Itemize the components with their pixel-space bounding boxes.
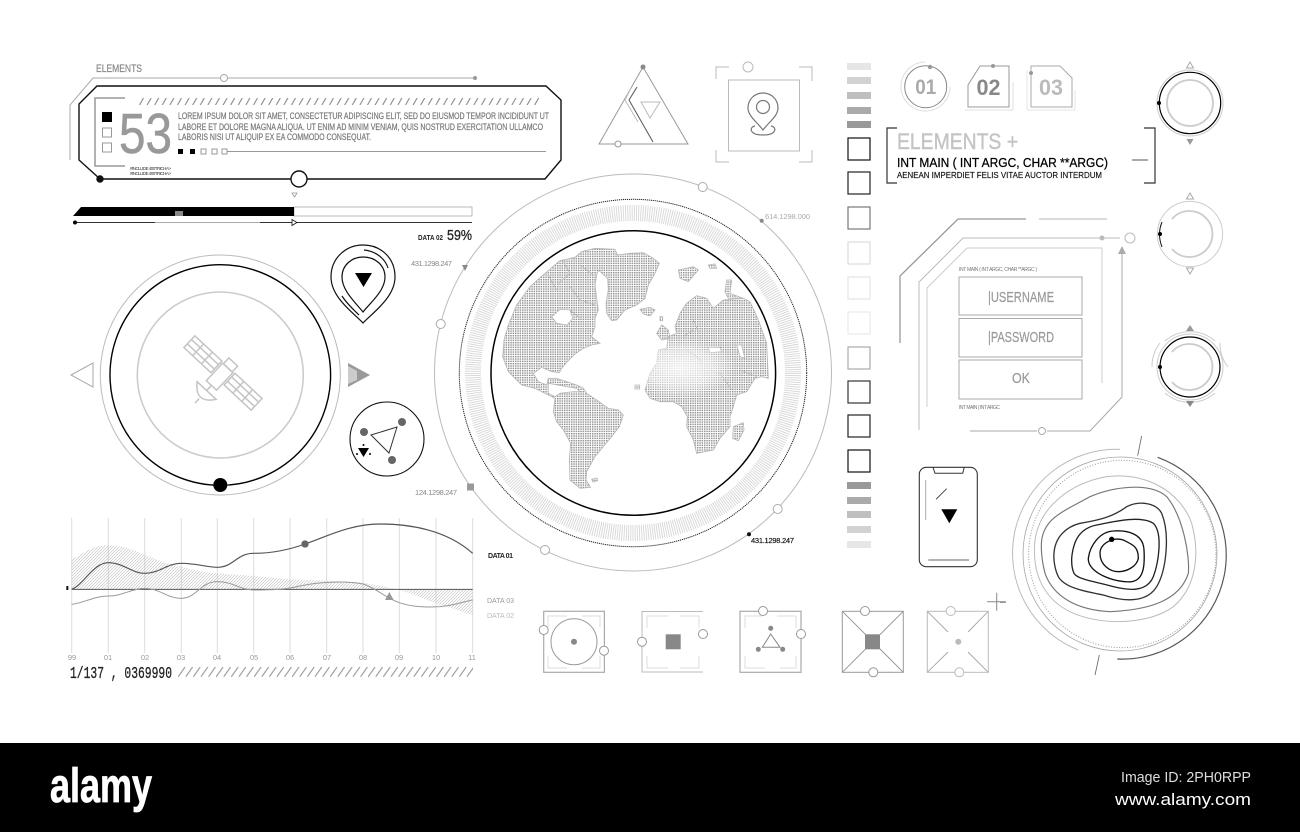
icon row: bottom target frames: [539, 593, 1006, 677]
frame 4: cross square: [842, 606, 903, 677]
panel: top-left text panel: [70, 63, 561, 187]
icon: plus mark: [987, 593, 1006, 611]
caption: INT MAIN ( INT ARGC, CHAR **ARGC ): [959, 267, 1037, 273]
icon: triangle badge: [599, 64, 688, 147]
label: data 02 59%: 59%: [447, 227, 472, 244]
eurasia and africa: [645, 296, 768, 453]
readout hatch: [178, 667, 473, 677]
arrow: left triangle: [71, 363, 93, 387]
label: data 02 59%: [418, 227, 472, 244]
icon: map pin: [331, 245, 395, 323]
footer caption: INT MAIN ( INT ARGC: [959, 405, 1000, 411]
coordinate labels: 124.1298.247: [415, 488, 457, 497]
include labels: #INCLUDE 400TRICHA>: [130, 166, 171, 171]
ok button: [959, 360, 1082, 399]
americas and greenland: [503, 248, 659, 488]
outer rings: [434, 174, 832, 571]
series legend: DATA 03: [487, 598, 514, 605]
frame 2: square: [638, 612, 708, 672]
panel: satellite dial: [71, 255, 370, 495]
ok button: OK: [1012, 370, 1030, 387]
ring markers: [436, 182, 782, 554]
series legend: DATA 02: [487, 613, 514, 620]
axis labels: 01: [104, 653, 112, 662]
heading: ELEMENTS: ELEMENTS: [96, 63, 142, 75]
password field: |PASSWORD: [988, 329, 1054, 346]
grey bracket: [95, 98, 125, 166]
pagination squares: [178, 149, 546, 154]
line chart: [66, 518, 514, 684]
arrow: right triangle: [348, 363, 370, 387]
coordinate labels: 614.1298.000: [765, 212, 810, 221]
lorem text block: LOREM IPSUM DOLOR SIT AMET, CONSECTETUR ADIPISCING ELIT, SED DO EIUSMOD TEMPOR INCIDIDUNT UT: [178, 111, 549, 121]
axis labels: 07: [323, 653, 331, 662]
badge 01: 01: [915, 76, 936, 99]
grey outer frame: [70, 74, 477, 160]
series legend: [487, 553, 514, 620]
badge 02: [965, 64, 1013, 110]
lorem text block: LABORE ET DOLORE MAGNA ALIQUA. UT ENIM AD MINIM VENIAM, QUIS NOSTRUD EXERCITATION ULLAMCO: [178, 122, 543, 132]
icon: phone: [919, 467, 977, 567]
frame 1: circle: [539, 611, 608, 672]
password field: [959, 318, 1082, 357]
numbered badges: [901, 62, 1075, 111]
panel: elements heading box: [887, 128, 1155, 183]
icon: satellite: [161, 331, 267, 434]
axis labels: 08: [359, 653, 367, 662]
code line: INT MAIN ( INT ARGC, CHAR **ARGC): [897, 155, 1108, 170]
axis labels: 09: [395, 653, 403, 662]
contour radar: [1000, 436, 1226, 675]
badge 03: [1027, 66, 1075, 110]
label: data 02 59%: DATA 02: [418, 233, 443, 242]
icon: triangle radar: [350, 402, 424, 476]
subtitle: AENEAN IMPERDIET FELIS VITAE AUCTOR INTERDUM: [897, 170, 1102, 180]
axis labels: 05: [250, 653, 258, 662]
outer arcs: [1000, 436, 1226, 675]
contour lines: [1034, 476, 1196, 622]
image id: Image ID: 2PH0RPP: [1121, 769, 1251, 786]
include labels: #INCLUDE 400TRICHA>: [130, 171, 171, 176]
axis labels: 03: [177, 653, 185, 662]
icon: location frame: [716, 62, 812, 162]
coast details: [548, 262, 757, 389]
coordinate labels: 431.1298.247: [411, 259, 452, 268]
chart curves: [66, 524, 473, 615]
hatch strip: [138, 98, 540, 105]
lorem text block: [178, 111, 549, 142]
coordinate labels: 431.1298.247: [751, 536, 794, 545]
panel: login form: [900, 219, 1135, 434]
axis labels: 02: [141, 653, 149, 662]
footer band: [0, 743, 1300, 832]
badge 01: [901, 62, 950, 111]
axis labels: 11: [468, 653, 476, 662]
badge 03: 03: [1039, 75, 1063, 100]
username field: [959, 277, 1082, 315]
axis labels: 10: [432, 653, 440, 662]
progress bar: [73, 193, 472, 244]
dial knob 3: [1152, 325, 1228, 407]
logo: alamy: [50, 760, 152, 813]
map fade: [624, 338, 736, 398]
axis labels: 04: [213, 653, 221, 662]
website: www.alamy.com: [1114, 790, 1251, 809]
frame 3: triangle: [740, 606, 806, 672]
username field: |USERNAME: [988, 289, 1054, 306]
frame 5: cross dot: [927, 606, 988, 677]
big number 53: 53: [119, 102, 172, 166]
lorem text block: LABORIS NISI UT ALIQUIP EX EA COMMODO CONSEQUAT.: [178, 132, 371, 142]
axis labels: 99: [68, 653, 76, 662]
islands: [592, 264, 744, 482]
coordinate labels: [411, 212, 810, 545]
series legend: DATA 01: [488, 553, 513, 560]
axis labels: [68, 653, 476, 662]
elements title: ELEMENTS +: [897, 129, 1018, 154]
badge 02: 02: [976, 75, 1000, 100]
axis labels: 06: [286, 653, 294, 662]
readout value: 1/137 , 0369990: [70, 665, 172, 684]
status squares: [102, 112, 112, 152]
grid lines: [72, 518, 473, 653]
globe: [411, 174, 832, 571]
dial knob 1: [1157, 62, 1223, 145]
world map: [503, 248, 768, 488]
black main frame: [79, 86, 561, 187]
include labels: [130, 166, 171, 176]
dial knob 2: [1157, 193, 1223, 274]
colour swatch column: [847, 63, 871, 548]
frame lines: [900, 219, 1135, 434]
